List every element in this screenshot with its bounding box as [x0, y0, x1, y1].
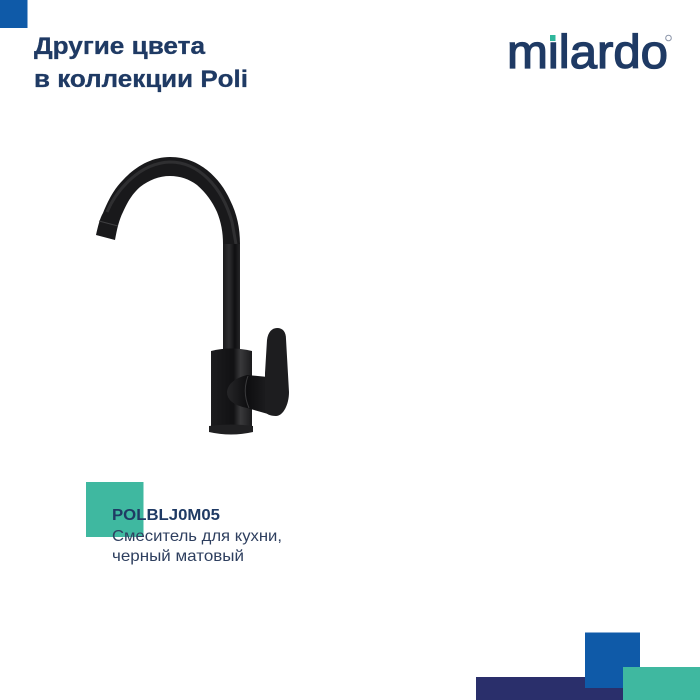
teal square behind product label: [86, 482, 144, 537]
spout aerator band: [99, 221, 118, 226]
decorative blocks: bottom right: [476, 632, 700, 700]
logo: milardo: milardo: [507, 25, 668, 78]
product label: Смеситель для кухни,: [112, 528, 282, 545]
faucet: [96, 157, 289, 434]
title: [34, 33, 248, 93]
lower tube shading: [223, 244, 240, 352]
spout tube: [96, 157, 240, 352]
title: в коллекции Poli: [34, 66, 248, 93]
connector edge: [245, 376, 249, 408]
faucet base: [209, 424, 253, 434]
product label: POLBLJ0M05: [112, 507, 220, 524]
product label: черный матовый: [112, 548, 244, 565]
corner square: top left: [0, 0, 28, 28]
handle connector: [227, 375, 268, 414]
product label: [112, 507, 282, 565]
faucet body: [211, 348, 252, 428]
spout highlight: [107, 162, 236, 244]
handle lever: [265, 328, 289, 416]
title: Другие цвета: [34, 33, 206, 60]
